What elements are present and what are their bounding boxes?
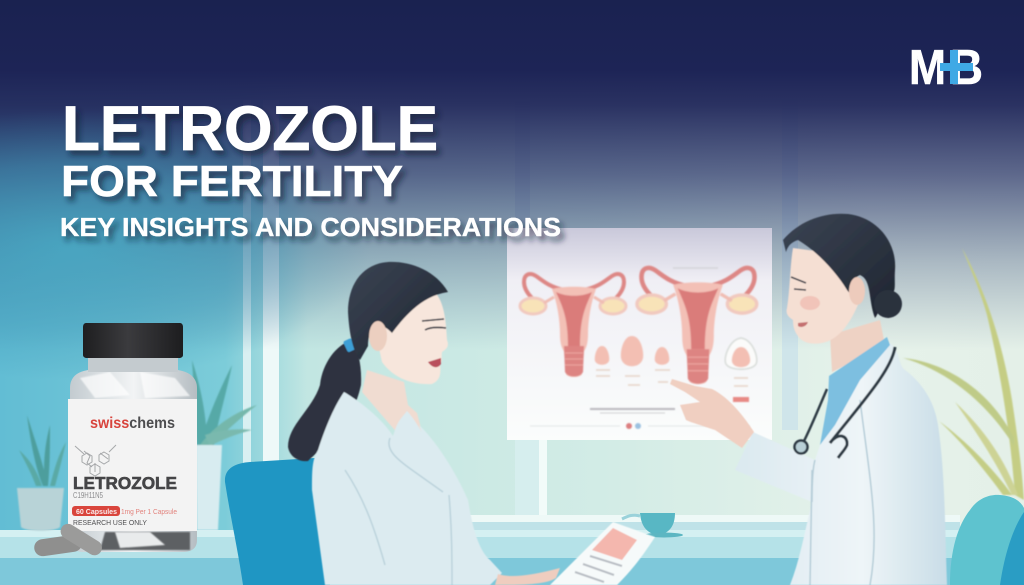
dosage: 1mg Per 1 Capsule bbox=[121, 507, 177, 516]
lips bbox=[428, 358, 441, 367]
right chair bbox=[950, 495, 1024, 585]
arm and pointing hand bbox=[670, 379, 754, 448]
left chair bbox=[225, 458, 330, 585]
coffee cup and saucer bbox=[622, 513, 683, 538]
product: supplement bottle bbox=[33, 323, 197, 558]
eye and brow bbox=[791, 277, 806, 290]
logo: M+B: M bbox=[909, 41, 946, 95]
molecule icon bbox=[75, 445, 116, 476]
stethoscope bbox=[794, 347, 895, 458]
capsule count pill: 60 Capsules bbox=[76, 507, 117, 516]
left teal glow bbox=[0, 100, 380, 390]
lips bbox=[798, 322, 808, 327]
neck bbox=[830, 320, 885, 372]
formula: C19H11N5 bbox=[73, 491, 103, 500]
neck and chest bbox=[362, 370, 433, 474]
hair bun bbox=[874, 290, 902, 318]
shirt folds bbox=[345, 438, 452, 585]
poster: reproductive anatomy chart bbox=[507, 228, 772, 440]
clipboard paper bbox=[550, 522, 655, 585]
doctor bbox=[670, 214, 947, 585]
loose capsules bbox=[33, 521, 105, 558]
shirt bbox=[312, 392, 502, 585]
logo: M+B bbox=[909, 41, 983, 95]
hand bbox=[495, 568, 560, 585]
eye and brow bbox=[422, 319, 446, 330]
logo: M+B: B bbox=[950, 41, 983, 95]
brand name: swisschems bbox=[90, 415, 175, 432]
blue shirt bbox=[820, 337, 890, 445]
plant: left potted plant bbox=[17, 415, 66, 531]
uterus diagram left bbox=[520, 274, 626, 377]
subtitle: KEY INSIGHTS AND CONSIDERATIONS bbox=[60, 214, 561, 242]
title line 2: FOR FERTILITY bbox=[61, 157, 403, 206]
face bbox=[375, 290, 448, 384]
label bbox=[68, 399, 197, 531]
hair bbox=[783, 214, 895, 318]
hair tie bbox=[343, 338, 356, 353]
title bbox=[60, 94, 561, 242]
cheek bbox=[800, 296, 820, 310]
uterus diagram right bbox=[637, 268, 757, 384]
cap bbox=[83, 323, 183, 358]
ponytail bbox=[288, 340, 361, 461]
ear bbox=[849, 277, 865, 305]
egg shapes and chart details bbox=[530, 268, 757, 429]
white coat bbox=[735, 343, 947, 585]
right plant bbox=[903, 248, 1024, 500]
woman patient bbox=[288, 262, 560, 585]
neck bbox=[88, 358, 178, 372]
title line 1: LETROZOLE bbox=[62, 94, 438, 164]
ear bbox=[369, 321, 387, 351]
jar body with capsules inside bbox=[70, 370, 197, 552]
plant: potted plant behind bottle bbox=[192, 360, 257, 530]
top dark gradient overlay bbox=[0, 0, 1024, 350]
face bbox=[787, 248, 860, 344]
coat folds bbox=[810, 400, 874, 585]
research use: RESEARCH USE ONLY bbox=[73, 518, 147, 527]
hair bbox=[348, 262, 448, 360]
product name: LETROZOLE bbox=[73, 473, 177, 493]
